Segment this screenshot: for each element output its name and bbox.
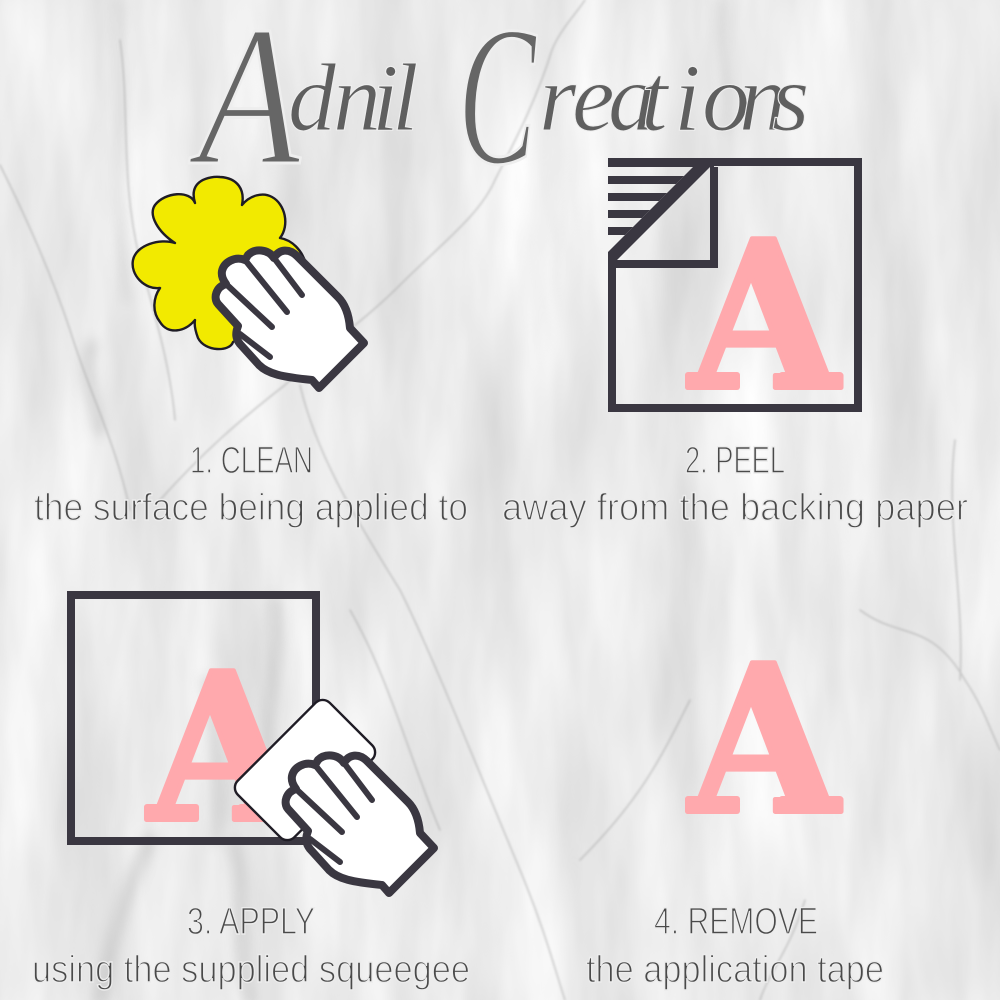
step 1 text: 1. CLEAN (190, 440, 313, 482)
step 1 text (34, 440, 468, 529)
peeled corner (608, 167, 718, 268)
icon: square with squeegee and hand (apply) (71, 595, 434, 893)
square frame (612, 162, 858, 408)
step 1 text: the surface being applied to (34, 487, 468, 529)
icon: sponge and hand (clean) (133, 177, 364, 388)
step 3 text: using the supplied squeegee (32, 949, 470, 991)
step 4 text: the application tape (586, 949, 884, 991)
letter A: A (687, 196, 842, 436)
step 3 text (32, 901, 470, 991)
step 2 text: 2. PEEL (685, 440, 785, 482)
letter A: A (146, 628, 301, 868)
square frame (71, 595, 316, 841)
sponge (133, 177, 310, 349)
icon: letter A (remove): A (687, 620, 842, 860)
step 2 text: away from the backing paper (502, 487, 968, 529)
backing stripes (608, 158, 714, 235)
step 4 text (586, 901, 884, 991)
hand (216, 250, 364, 388)
squeegee (231, 696, 379, 844)
title: dnil (288, 44, 419, 151)
hand (286, 755, 434, 893)
step 3 text: 3. APPLY (187, 901, 315, 943)
step 2 text (502, 440, 968, 529)
icon: peeling square (peel) (608, 158, 858, 436)
title: reations (539, 44, 809, 151)
title (189, 0, 809, 207)
step 4 text: 4. REMOVE (654, 901, 818, 943)
